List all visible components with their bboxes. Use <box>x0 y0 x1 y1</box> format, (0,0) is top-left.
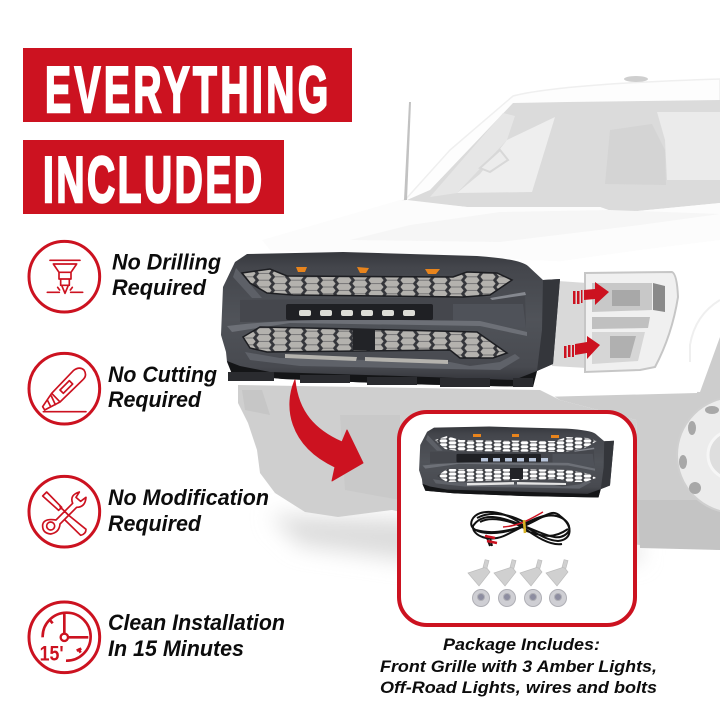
windshield frame <box>407 100 720 213</box>
title line 1: EVERYTHING <box>45 54 328 126</box>
label: No Modification <box>108 485 269 510</box>
inset grille <box>419 427 614 498</box>
roof antenna base <box>624 76 648 82</box>
truck shadow <box>270 515 640 562</box>
feature: no cutting <box>29 353 218 424</box>
wheel rim <box>677 397 720 513</box>
label: Required <box>112 275 207 300</box>
seat <box>605 124 666 185</box>
upper mesh <box>242 269 512 297</box>
label: No Drilling <box>112 250 222 274</box>
truck cab roof <box>270 79 720 240</box>
wiring harness <box>471 512 570 546</box>
windshield glass left <box>430 113 515 197</box>
passenger glass <box>457 117 555 193</box>
feature: no drilling <box>29 241 222 312</box>
lower bumper <box>238 385 640 545</box>
arrow: upper headlight <box>573 282 609 305</box>
amber lights <box>296 267 440 274</box>
hood <box>262 200 720 262</box>
center block <box>353 329 375 350</box>
main grille <box>221 252 560 387</box>
lower body right <box>536 337 720 550</box>
mounting bolts <box>468 560 568 586</box>
icon: 15 minute clock <box>29 602 100 673</box>
hood shade <box>350 210 720 242</box>
mirror cut-out <box>480 150 508 172</box>
bumper recess <box>340 415 400 500</box>
package caption: Package Includes: <box>443 635 600 654</box>
arrow: curved to package <box>290 380 363 481</box>
label: No Cutting <box>108 362 218 387</box>
icon: wrench and screwdriver <box>29 476 100 547</box>
package caption: Front Grille with 3 Amber Lights, <box>380 657 657 676</box>
icon: utility knife <box>29 353 100 424</box>
icon: 15 minute clock: 15' <box>40 642 64 666</box>
lower mesh <box>243 327 507 358</box>
icon: drill <box>29 241 100 312</box>
fender <box>536 240 720 397</box>
package caption: Off-Road Lights, wires and bolts <box>380 678 657 697</box>
off-road LEDs <box>299 310 415 316</box>
headlight surround <box>552 281 587 368</box>
background truck <box>238 76 720 562</box>
label: Clean Installation <box>108 610 285 635</box>
label: In 15 Minutes <box>108 636 244 661</box>
grille body <box>221 252 560 387</box>
feature: no modification <box>29 476 269 547</box>
title line 2: INCLUDED <box>43 144 262 216</box>
panel: package contents <box>399 412 635 625</box>
label: Required <box>108 387 202 412</box>
label: Required <box>108 511 202 536</box>
windshield glass right <box>657 112 720 180</box>
antenna <box>404 102 411 200</box>
headlight <box>585 272 678 372</box>
bumper side vent <box>242 390 270 415</box>
mounting clips <box>228 372 533 387</box>
panel frame <box>399 412 635 625</box>
lower light strip <box>285 354 448 364</box>
tire <box>637 500 720 550</box>
flange nuts <box>472 590 566 606</box>
arrow: lower headlight <box>564 336 600 359</box>
feature: clean installation <box>29 602 285 673</box>
fender arch line <box>690 300 720 362</box>
